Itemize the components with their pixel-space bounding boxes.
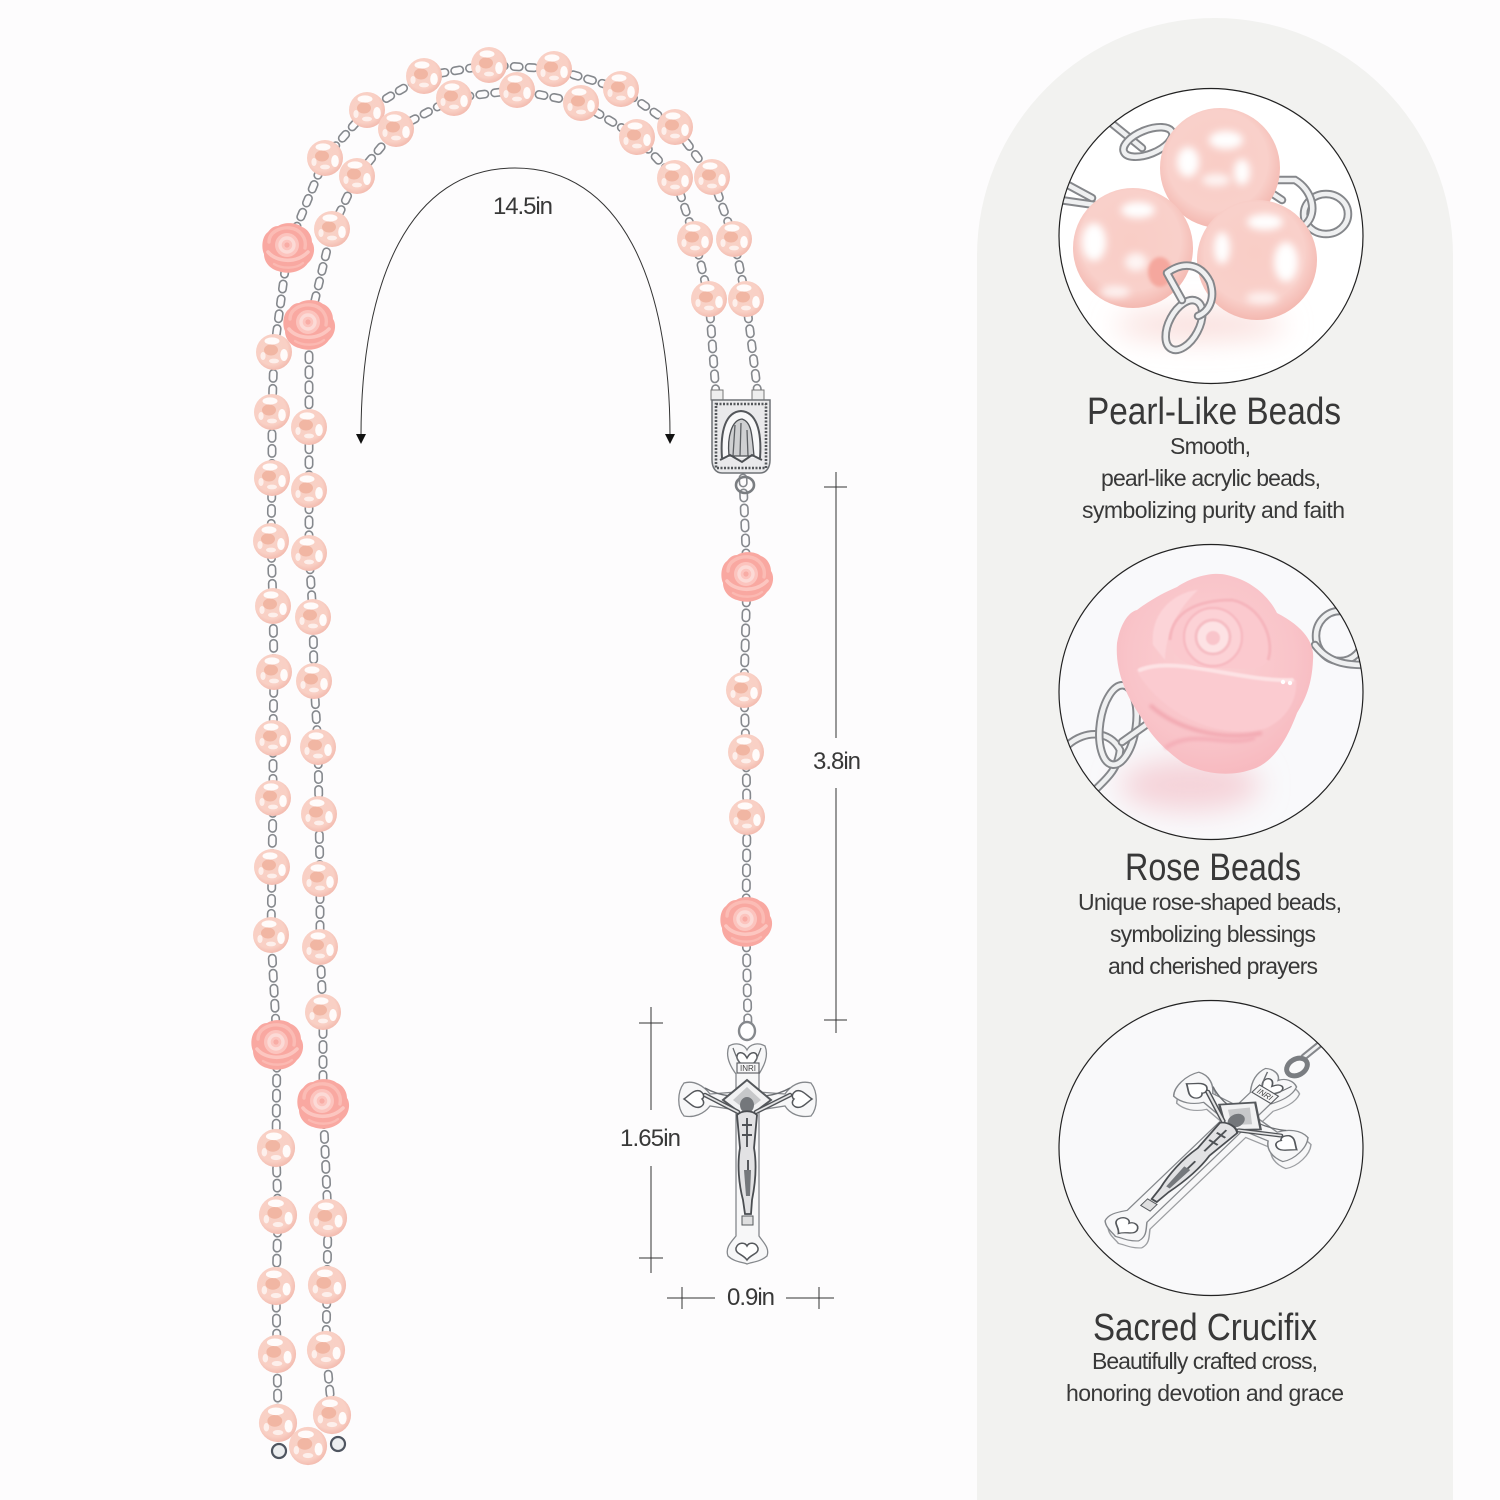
description: rose beads: and cherished prayers: [1108, 953, 1318, 979]
label 3.8in: 3.8in: [813, 748, 861, 775]
description: sacred crucifix: honoring devotion and grace: [1066, 1380, 1344, 1406]
label 1.65in: 1.65in: [620, 1125, 681, 1152]
description: rose beads: [1078, 889, 1342, 979]
centerpiece medal: [711, 390, 770, 493]
description: rose beads: Unique rose-shaped beads,: [1078, 889, 1342, 915]
arrowhead right: [665, 434, 675, 444]
description: pearl-like beads: symbolizing purity and faith: [1082, 497, 1345, 523]
feature: sacred crucifix: [1057, 1000, 1363, 1406]
dimension: crucifix height 1.65in: [620, 1007, 681, 1273]
heading: Sacred Crucifix: Sacred Crucifix: [1093, 1307, 1317, 1349]
feature: rose beads: [1059, 544, 1370, 979]
chain: inner strand: [309, 90, 709, 1415]
chain: outer strand: [271, 65, 746, 1423]
heading: Pearl-Like Beads: Pearl-Like Beads: [1087, 391, 1341, 433]
dimension: necklace length 14.5in: [356, 168, 675, 444]
arrowhead left: [356, 434, 366, 444]
dimension: crucifix width 0.9in: [667, 1284, 834, 1311]
crucifix pendant: [679, 1022, 816, 1264]
heading: Rose Beads: Rose Beads: [1125, 847, 1301, 889]
rosary necklace: [251, 47, 816, 1465]
label 14.5in: 14.5in: [493, 193, 553, 220]
description: sacred crucifix: Beautifully crafted cross,: [1092, 1348, 1318, 1374]
circle: crucifix close-up: [1057, 1000, 1363, 1296]
beads: top arc: [307, 47, 764, 317]
description: pearl-like beads: Smooth,: [1170, 433, 1251, 459]
description: pearl-like beads: [1082, 433, 1345, 523]
beads: center drop: [726, 672, 765, 835]
circle: pearl close-up: [1059, 88, 1363, 384]
beads: left inner strand: [289, 409, 351, 1465]
end caps: [272, 1437, 345, 1458]
circle: rose close-up: [1059, 544, 1370, 840]
dimension: drop length 3.8in: [813, 472, 861, 1033]
description: sacred crucifix: [1066, 1348, 1344, 1406]
description: rose beads: symbolizing blessings: [1110, 921, 1316, 947]
rose beads: [251, 223, 773, 1129]
beads: left outer strand: [253, 334, 297, 1442]
feature: pearl-like beads: [1059, 88, 1363, 523]
description: pearl-like beads: pearl-like acrylic beads,: [1101, 465, 1321, 491]
chain: to centerpiece and crucifix: [709, 299, 758, 1030]
label 0.9in: 0.9in: [727, 1284, 775, 1311]
panel: features arch: [977, 18, 1453, 1500]
